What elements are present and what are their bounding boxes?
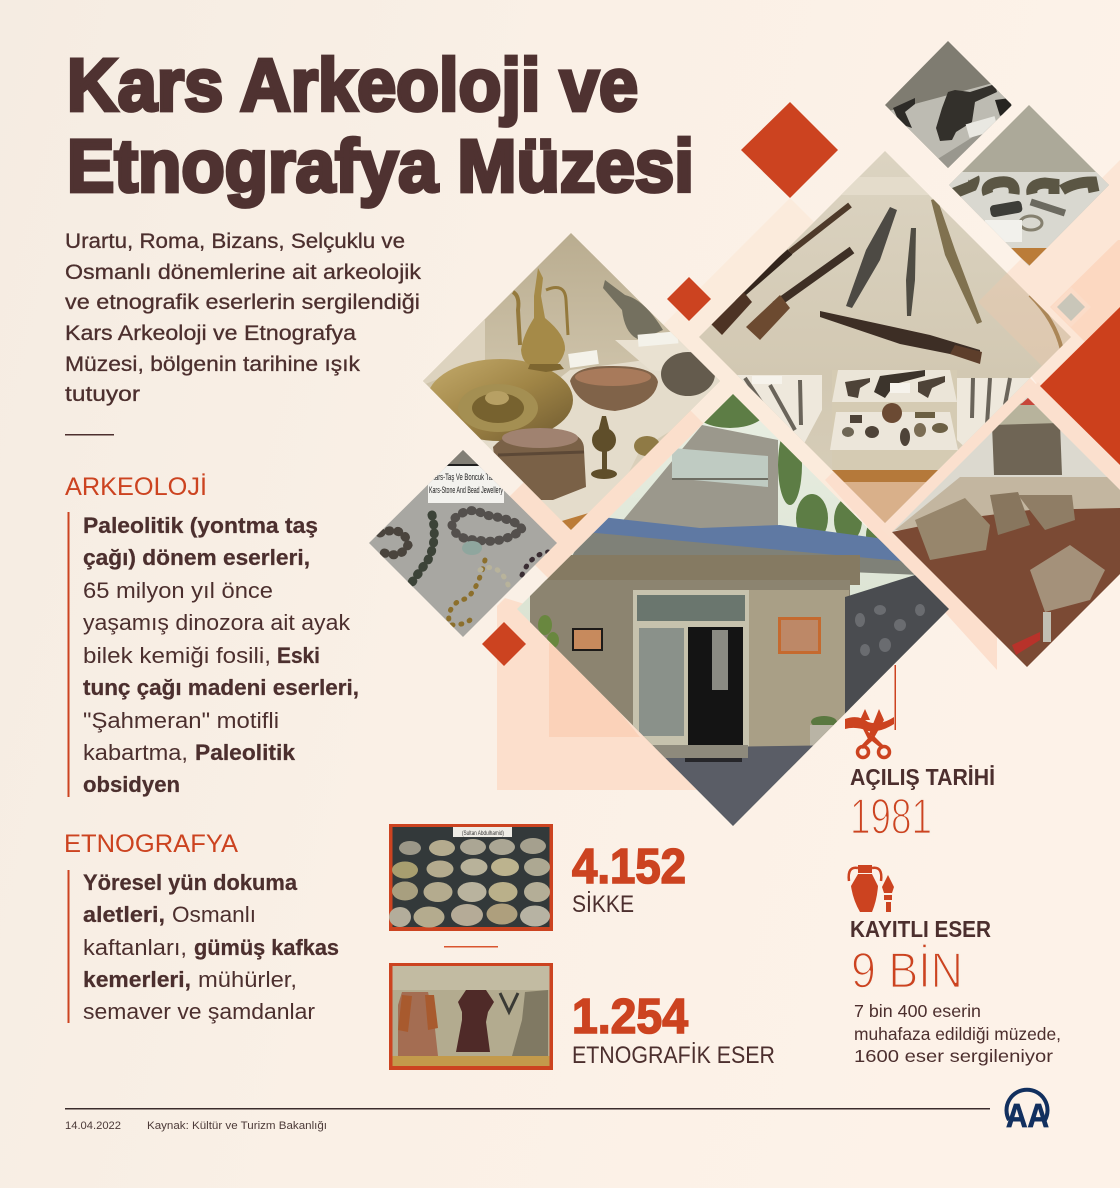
rifle two xyxy=(746,250,852,340)
photo: coins xyxy=(389,824,553,931)
photo: bracelets xyxy=(949,105,1109,266)
curved sword xyxy=(931,198,982,324)
icon: AA logo: AA xyxy=(1006,1097,1049,1134)
stat: coins xyxy=(572,840,686,918)
intro paragraph: Kars Arkeoloji ve Etnografya xyxy=(65,321,356,345)
red diamond lower left xyxy=(482,622,526,666)
stat: registered works: 9 BİN xyxy=(851,942,963,998)
beads display label xyxy=(428,464,504,503)
rifle three xyxy=(820,311,982,364)
panel: Arkeoloji text: tunç çağı madeni eserleri, xyxy=(83,675,359,700)
stat: registered works: muhafaza edildiği müzede, xyxy=(854,1024,1061,1044)
entrance xyxy=(633,590,749,750)
title xyxy=(67,44,694,208)
flask xyxy=(603,280,663,340)
panel: Etnografya text: Osmanlı xyxy=(172,902,256,927)
stat: opening date: 1981 xyxy=(850,788,932,844)
bracelet label xyxy=(985,220,1022,242)
panel: Etnografya text: mühürler, xyxy=(198,967,297,992)
rifle one xyxy=(709,205,850,335)
intro paragraph: Müzesi, bölgenin tarihine ışık xyxy=(65,352,360,376)
photo: ethnographic costumes xyxy=(389,963,553,1070)
red diamond large xyxy=(741,102,838,198)
peach background shapes xyxy=(488,160,1120,790)
stat: coins: 4.152 xyxy=(572,840,686,894)
footer date and source xyxy=(65,1120,327,1132)
ewer xyxy=(513,268,568,372)
title: Etnografya Müzesi xyxy=(67,124,694,208)
coin tray label xyxy=(453,827,512,837)
facade xyxy=(530,555,860,585)
panel: Arkeoloji text: yaşamış dinozora ait ayak xyxy=(83,610,351,635)
intro paragraph: ve etnografik eserlerin sergilendiği xyxy=(65,290,420,314)
overlay on weapons photo xyxy=(978,273,1071,366)
coins xyxy=(389,838,550,928)
stat: registered works: 7 bin 400 eserin xyxy=(854,1001,981,1021)
pistol label xyxy=(966,116,998,138)
title: Kars Arkeoloji ve xyxy=(67,44,638,126)
copper bowl xyxy=(570,366,658,411)
pavement xyxy=(640,745,850,830)
bracelets xyxy=(952,178,1094,194)
beads display label: Kars-Stone And Bead Jewellery xyxy=(429,485,503,495)
panel: Etnografya text: semaver ve şamdanlar xyxy=(83,999,316,1024)
photo: weapons display xyxy=(690,150,1080,530)
footer date and source: 14.04.2022 xyxy=(65,1120,121,1132)
tray xyxy=(427,359,573,441)
panel: Arkeoloji text: 65 milyon yıl önce xyxy=(83,578,273,603)
brass ladle xyxy=(634,436,660,456)
bead strings xyxy=(380,511,548,625)
intro paragraph xyxy=(65,229,421,406)
pistol xyxy=(936,84,997,141)
dagger one xyxy=(846,207,897,308)
bow xyxy=(1030,295,1062,350)
labels xyxy=(568,350,599,368)
photo: metal vessels xyxy=(420,230,725,535)
intro paragraph: Urartu, Roma, Bizans, Selçuklu ve xyxy=(65,229,405,253)
panel: Etnografya text: kemerleri, xyxy=(83,967,191,992)
censer xyxy=(591,416,617,479)
stone wall xyxy=(845,575,955,720)
stat: opening date: AÇILIŞ TARİHİ xyxy=(850,764,995,790)
panel: Arkeoloji text: "Şahmeran" motifli xyxy=(83,708,279,733)
intro paragraph: Osmanlı dönemlerine ait arkeolojik xyxy=(65,260,421,284)
panel: Arkeoloji text: çağı) dönem eserleri, xyxy=(83,545,310,570)
lidded copper box xyxy=(493,428,586,500)
dagger two xyxy=(906,228,916,316)
photo: museum building xyxy=(515,390,955,830)
beads display label: Kars-Taş Ve Boncuk Takılar xyxy=(431,472,503,482)
photo: pistol xyxy=(885,41,1012,168)
panel: Arkeoloji text: Paleolitik (yontma taş xyxy=(83,513,318,538)
intro paragraph: tutuyor xyxy=(65,382,140,406)
panel: Etnografya text: aletleri, xyxy=(83,902,165,927)
grey diamond with halo xyxy=(1051,287,1091,327)
panel: Etnografya text: kaftanları, xyxy=(83,935,187,960)
stat: ethnographic works xyxy=(572,990,775,1069)
upper block xyxy=(624,425,778,528)
relief block xyxy=(992,423,1062,475)
heading: Arkeoloji: ARKEOLOJİ xyxy=(65,472,207,501)
museum sign xyxy=(778,617,821,654)
dark bowl xyxy=(661,352,715,396)
stones xyxy=(915,492,1105,612)
display plinths xyxy=(737,370,1030,527)
panel: Arkeoloji text: kabartma, xyxy=(83,740,188,765)
stat: registered works: KAYITLI ESER xyxy=(850,916,991,942)
panel: Etnografya text: gümüş kafkas xyxy=(194,935,339,960)
footer date and source: Kaynak: Kültür ve Turizm Bakanlığı xyxy=(147,1120,327,1132)
valve xyxy=(1043,612,1051,642)
footer rule xyxy=(65,1108,990,1110)
lower blades xyxy=(745,378,1010,430)
panel: Etnografya text: Yöresel yün dokuma xyxy=(83,870,297,895)
icon: amphora and brush xyxy=(849,865,894,912)
wall picture xyxy=(572,628,603,651)
panel: Arkeoloji text: obsidyen xyxy=(83,772,180,797)
panel: Arkeoloji text: bilek kemiği fosili, xyxy=(83,643,271,668)
red diamond small xyxy=(667,277,711,321)
stat: ethnographic works: ETNOGRAFİK ESER xyxy=(572,1042,775,1069)
icon: ribbon and scissors xyxy=(845,665,896,758)
panel: Arkeoloji text: Eski xyxy=(277,643,320,668)
panel: Arkeoloji text xyxy=(68,512,359,797)
stat: coins: SİKKE xyxy=(572,891,634,918)
photo: stone reliefs xyxy=(888,395,1120,670)
red diamond right edge xyxy=(1040,307,1120,465)
roof xyxy=(570,517,920,575)
coin tray label: (Sultan Abdulhamid) xyxy=(462,831,504,837)
stat: ethnographic works: 1.254 xyxy=(572,990,688,1044)
heading: Etnografya: ETNOGRAFYA xyxy=(64,830,238,858)
panel: Arkeoloji text: Paleolitik xyxy=(195,740,295,765)
trees xyxy=(704,394,889,549)
plant xyxy=(811,716,837,728)
stat: opening date xyxy=(850,764,995,844)
small display objects xyxy=(752,370,948,446)
stat: registered works xyxy=(850,916,1061,1066)
stat: registered works: 1600 eser sergileniyor xyxy=(854,1046,1053,1066)
photo: beads xyxy=(365,448,560,640)
panel: Etnografya text xyxy=(68,870,339,1024)
